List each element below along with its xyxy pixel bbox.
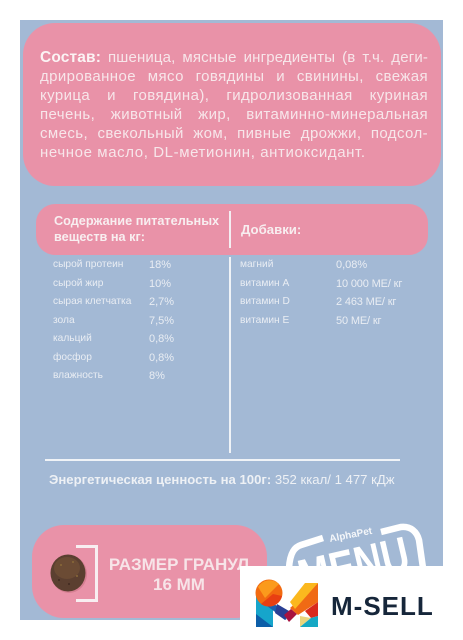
nutrients table: сырой протеин bbox=[53, 259, 123, 270]
nutrients table: фосфор bbox=[53, 352, 92, 363]
icon: M mark bbox=[256, 580, 318, 627]
additives table bbox=[240, 259, 402, 327]
additives table: витамин E bbox=[240, 315, 289, 326]
nutrients table: 8% bbox=[149, 370, 165, 382]
logo: M-SELL bbox=[256, 580, 434, 627]
additives table: магний bbox=[240, 259, 273, 270]
composition text: Состав: пшеница, мясные ингредиенты (в т.ч. деги- bbox=[40, 48, 428, 66]
column divider bbox=[229, 257, 230, 453]
additives table: 0,08% bbox=[336, 259, 367, 271]
composition text: курица и говядина), гидролизованная куриная bbox=[40, 86, 428, 104]
watermark background bbox=[240, 566, 463, 640]
nutrients table: 0,8% bbox=[149, 333, 174, 345]
nutrients table: влажность bbox=[53, 370, 103, 381]
nutrients table: 7,5% bbox=[149, 315, 174, 327]
logo: AlphaPet Menu: AlphaPet bbox=[328, 526, 374, 545]
additives table: витамин A bbox=[240, 278, 289, 289]
nutrients table bbox=[53, 259, 174, 382]
composition text: печень, животный жир, витаминно-минеральная bbox=[40, 106, 428, 122]
granule size text: 16 ММ bbox=[153, 575, 205, 594]
additives table: 50 МЕ/ кг bbox=[336, 315, 381, 327]
text: M-SELL: M-SELL bbox=[331, 591, 434, 621]
composition text: нечное масло, DL-метионин, антиоксидант. bbox=[40, 144, 366, 160]
nutrients table: сырой жир bbox=[53, 278, 103, 289]
heading: nutrients: веществ на кг: bbox=[54, 230, 145, 244]
nutrients table: 2,7% bbox=[149, 296, 174, 308]
nutrients table: 10% bbox=[149, 278, 171, 290]
composition text: дрированное мясо говядины и свинины, свежая bbox=[40, 68, 428, 84]
nutrients table: зола bbox=[53, 315, 75, 326]
composition text bbox=[40, 48, 428, 160]
additives table: витамин D bbox=[240, 296, 290, 307]
panel: granule size bbox=[32, 525, 267, 618]
granule size text bbox=[109, 555, 249, 594]
energy value: Энергетическая ценность на 100г: 352 ккал/ 1 477 кДж bbox=[49, 472, 395, 487]
composition text: смесь, свекольный жом, пивные дрожжи, подсол- bbox=[40, 124, 428, 142]
nutrients table: сырая клетчатка bbox=[53, 296, 131, 307]
nutrients table: 18% bbox=[149, 259, 171, 271]
column divider top bbox=[229, 211, 230, 248]
horizontal rule bbox=[45, 459, 400, 460]
additives table: 2 463 МЕ/ кг bbox=[336, 296, 396, 308]
granule size text: РАЗМЕР ГРАНУЛ bbox=[109, 555, 249, 574]
nutrients table: 0,8% bbox=[149, 352, 174, 364]
additives table: 10 000 МЕ/ кг bbox=[336, 278, 402, 290]
heading: nutrients: Содержание питательных bbox=[54, 214, 219, 228]
heading: nutrients bbox=[54, 214, 219, 244]
nutrients table: кальций bbox=[53, 333, 92, 344]
panel: table header bbox=[36, 204, 428, 255]
heading: additives: Добавки: bbox=[241, 222, 301, 237]
panel: composition bbox=[23, 23, 441, 186]
icon: kibble with bracket bbox=[50, 545, 98, 602]
